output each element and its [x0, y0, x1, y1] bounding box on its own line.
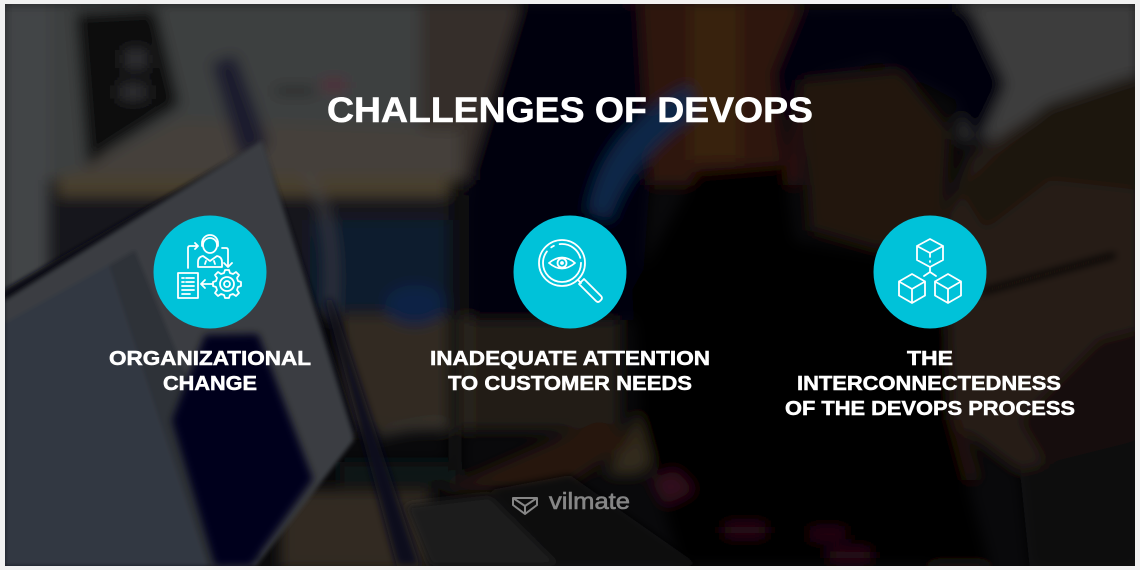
- logo: vilmate: [513, 488, 630, 514]
- label: organizational change: [109, 347, 311, 395]
- label: the interconnectedness of the DevOps process: INTERCONNECTEDNESS: [797, 372, 1061, 395]
- title: CHALLENGES OF DEVOPS: [327, 91, 813, 130]
- label: the interconnectedness of the DevOps process: THE: [907, 347, 953, 370]
- label: inadequate attention to customer needs: TO CUSTOMER NEEDS: [448, 372, 692, 395]
- label: organizational change: CHANGE: [163, 372, 257, 395]
- icon: three connected cubes: [874, 216, 986, 328]
- skateboard: [75, 8, 180, 167]
- skirt spots: [650, 470, 870, 560]
- icon: person, gear and document cycle: [154, 216, 266, 328]
- phone: [211, 55, 269, 160]
- woman hair and torso: [774, 8, 1006, 180]
- table leg: [448, 180, 462, 470]
- item: organizational change: [109, 216, 311, 395]
- item: inadequate attention to customer needs: [430, 216, 710, 395]
- label: organizational change: ORGANIZATIONAL: [109, 347, 311, 370]
- label: inadequate attention to customer needs: [430, 347, 710, 395]
- label: inadequate attention to customer needs: INADEQUATE ATTENTION: [430, 347, 710, 370]
- glasses: [981, 255, 1115, 292]
- keyboard: [405, 495, 560, 566]
- chair base and cable: [372, 425, 450, 437]
- item: interconnectedness of the DevOps process: [785, 216, 1075, 420]
- logo: vilmate: vilmate: [549, 488, 630, 514]
- desk items: [286, 88, 304, 94]
- icon: magnifying glass with eye: [514, 216, 626, 328]
- laptop back: [0, 141, 358, 570]
- label: the interconnectedness of the DevOps process: OF THE DEVOPS PROCESS: [785, 397, 1075, 420]
- label: the interconnectedness of the DevOps process: [785, 347, 1075, 420]
- blue chair: [588, 85, 695, 220]
